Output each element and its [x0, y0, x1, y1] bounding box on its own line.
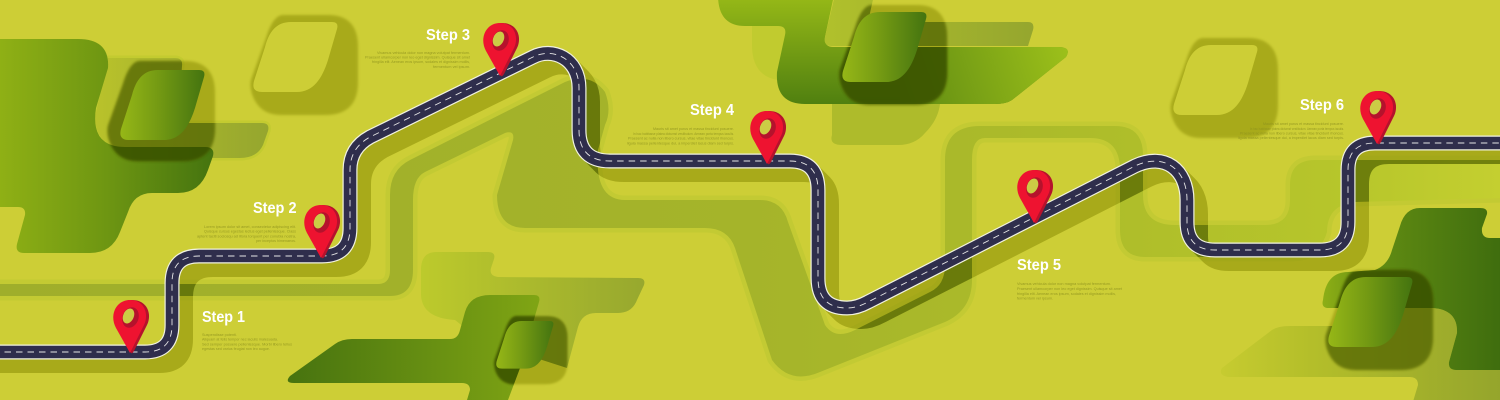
leaf shadow: upper-right pale	[1170, 38, 1278, 138]
leaf: top centre	[842, 12, 926, 82]
step 4 label	[627, 102, 734, 146]
step 4 label: Step 4	[690, 102, 734, 119]
leaf shadow: bottom right	[1326, 270, 1433, 370]
shape: top-centre olive bar	[825, 0, 1033, 46]
leaf shadow: left	[108, 61, 215, 161]
pin: step 4	[750, 111, 786, 164]
shape: bottom-right lower olive	[1221, 308, 1500, 400]
step 5 label: fermentum vel ipsum.	[1017, 296, 1053, 300]
leaf shadow: upper-left pale	[250, 15, 358, 115]
shape: left green	[0, 39, 213, 253]
step 6 label: Step 6	[1300, 97, 1344, 114]
step 6 label: ligula massa pellentesque dui, a imperdiet lacus diam sed turpis.	[1238, 135, 1344, 140]
step 5 label: Vivamus vehicula dolor non magna volutpat fermentum.	[1017, 281, 1111, 286]
pin: step 2	[304, 205, 340, 258]
winding olive band	[0, 79, 1500, 376]
leaf: upper-right pale	[1173, 45, 1257, 115]
leaf shadow: lower middle	[494, 316, 567, 384]
pin: step 6	[1360, 91, 1396, 144]
step 2 label: Step 2	[253, 200, 296, 217]
step 6 label: Praesent ac nulla non libero cursus, vitae vitae tincidunt rhoncus.	[1240, 130, 1344, 136]
leaf: lower middle	[496, 321, 553, 369]
shape: top-centre lower olive	[831, 104, 940, 145]
step 4 label: Mauris sit amet purus et massa tincidunt posuere.	[653, 126, 734, 131]
step 3 label: fermentum vel ipsum.	[433, 64, 470, 69]
road shadow	[0, 53, 1500, 366]
pin: step 5	[1017, 170, 1053, 223]
step 4 label: ligula massa pellentesque dui, a imperdiet lacus diam sed turpis.	[627, 140, 734, 146]
leaf: left	[120, 70, 204, 140]
step 2 label: Quisque cursus egestas lectus eget pellentesque. Class	[204, 228, 296, 234]
step 5 label: Praesent ullamcorper non leo eget dignissim. Quisque sit amet	[1017, 286, 1123, 291]
leaf: bottom right	[1328, 277, 1412, 347]
step 1 label: Step 1	[202, 309, 245, 326]
step 1 label	[202, 309, 292, 351]
step 5 label: fringilla elit. Aenean eros ipsum, sodales et dignissim mollis,	[1017, 291, 1116, 296]
leaf shadow: top centre	[840, 5, 947, 105]
pin: step 3	[483, 23, 519, 76]
road	[0, 53, 1500, 352]
step 1 label: egestas sed varius feugiat non leo augue.	[202, 346, 270, 351]
step 3 label: Praesent ullamcorper non leo eget dignissim. Quisque sit amet	[365, 54, 471, 60]
step 5 label: Step 5	[1017, 257, 1061, 274]
step 5 label	[1017, 257, 1123, 300]
step 4 label: Praesent ac nulla non libero cursus, vitae vitae tincidunt rhoncus.	[628, 136, 734, 140]
step 1 label: Aliquam at felis tempor nec iaculis malesuada.	[202, 336, 278, 342]
step 6 label	[1238, 97, 1344, 140]
step 2 label	[197, 200, 296, 243]
shape: lower-middle green	[288, 295, 539, 400]
shape: left olive underlay	[95, 58, 268, 158]
step 6 label: In hac habitasse platea dictumst vestibulum. Aenean porta tempus iaculis.	[1250, 126, 1344, 131]
leaf: upper-left pale	[253, 22, 337, 92]
step 3 label	[365, 27, 471, 69]
step 2 label: Lorem ipsum dolor sit amet, consectetur adipiscing elit.	[204, 224, 296, 229]
shape: bottom-right green	[1322, 208, 1500, 370]
shape: top-centre lighter halo	[752, 26, 790, 80]
step 1 label: Suspendisse potenti.	[202, 332, 237, 337]
step 3 label: Step 3	[426, 27, 470, 44]
step 4 label: In hac habitasse platea dictumst vestibulum. Aenean porta tempus iaculis.	[633, 131, 734, 136]
shape: lower-middle olive	[421, 252, 644, 368]
pin: step 1	[113, 300, 149, 353]
step 1 label: Sed semper posuere pellentesque. Morbi libero tellus	[202, 341, 292, 346]
shape: top-centre green	[718, 0, 1068, 104]
step 6 label: Mauris sit amet purus et massa tincidunt posuere.	[1263, 121, 1344, 126]
step 2 label: aptent taciti sociosqu ad litora torquent per conubia nostra,	[197, 234, 296, 238]
step 3 label: Vivamus vehicula dolor non magna volutpat fermentum.	[377, 50, 470, 55]
step 3 label: fringilla elit. Aenean eros ipsum, sodales et dignissim mollis,	[372, 59, 470, 64]
step 2 label: per inceptos himenaeos.	[256, 238, 296, 243]
